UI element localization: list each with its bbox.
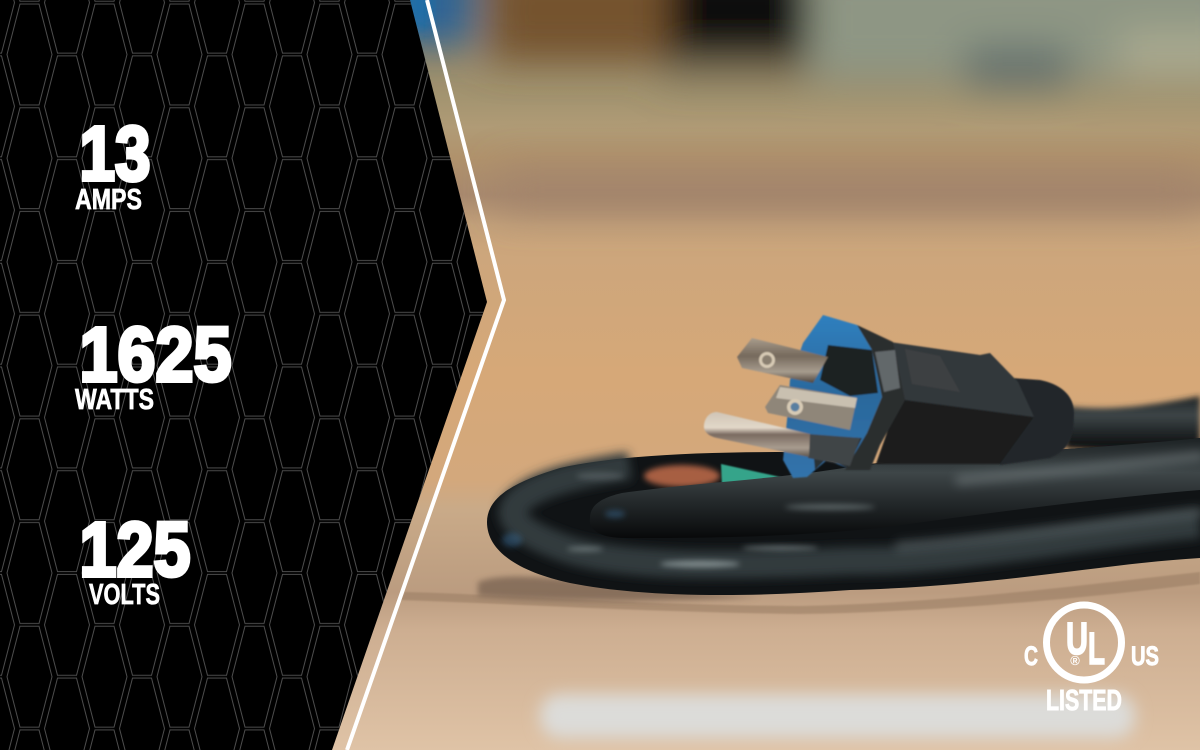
white chevron line xyxy=(347,0,504,750)
UL listed logo: ® xyxy=(1070,653,1080,668)
UL listed logo: LISTED xyxy=(1046,685,1122,717)
number 13: 13 xyxy=(80,111,150,197)
stat: 1625 watts xyxy=(75,312,232,416)
UL listed logo: C xyxy=(1024,641,1038,671)
middle blade xyxy=(765,385,857,430)
right-hand soft cord sheen xyxy=(900,456,1200,546)
UL listed logo xyxy=(1024,605,1159,717)
dark centre of plug face xyxy=(820,345,878,396)
UL listed logo: L xyxy=(1088,623,1105,674)
power cord coil and plug xyxy=(487,315,1200,595)
embossed panel xyxy=(905,349,960,392)
number 1625: 1625 xyxy=(80,312,232,398)
lower cord tube shading xyxy=(512,466,1200,565)
blurred white strip on table xyxy=(540,694,1135,738)
top blade xyxy=(737,338,828,383)
plug, slightly soft focus xyxy=(704,315,1074,478)
stat: 125 volts xyxy=(80,507,190,611)
ground pin xyxy=(704,412,810,457)
label watts: WATTS xyxy=(75,384,154,416)
black panel with hexagon pattern xyxy=(0,0,487,750)
coil silhouette xyxy=(487,438,1200,595)
blue face of plug xyxy=(783,315,882,478)
green wire xyxy=(721,464,785,486)
exposed copper wire xyxy=(644,465,720,487)
ground pin socket xyxy=(808,434,860,466)
cord highlights xyxy=(502,472,875,568)
back cord right xyxy=(1065,396,1200,450)
label volts: VOLTS xyxy=(89,579,160,611)
body lower section xyxy=(876,396,1034,464)
UL listed logo: U xyxy=(1066,613,1088,664)
UL listed logo: US xyxy=(1131,641,1159,671)
stat: 13 amps xyxy=(75,111,150,216)
middle cord xyxy=(590,438,1200,538)
body upper deck xyxy=(890,342,1034,417)
label amps: AMPS xyxy=(75,184,142,216)
strain relief xyxy=(1000,378,1074,465)
plug collar xyxy=(845,325,905,470)
number 125: 125 xyxy=(80,507,190,593)
table edge texture xyxy=(400,572,1200,614)
